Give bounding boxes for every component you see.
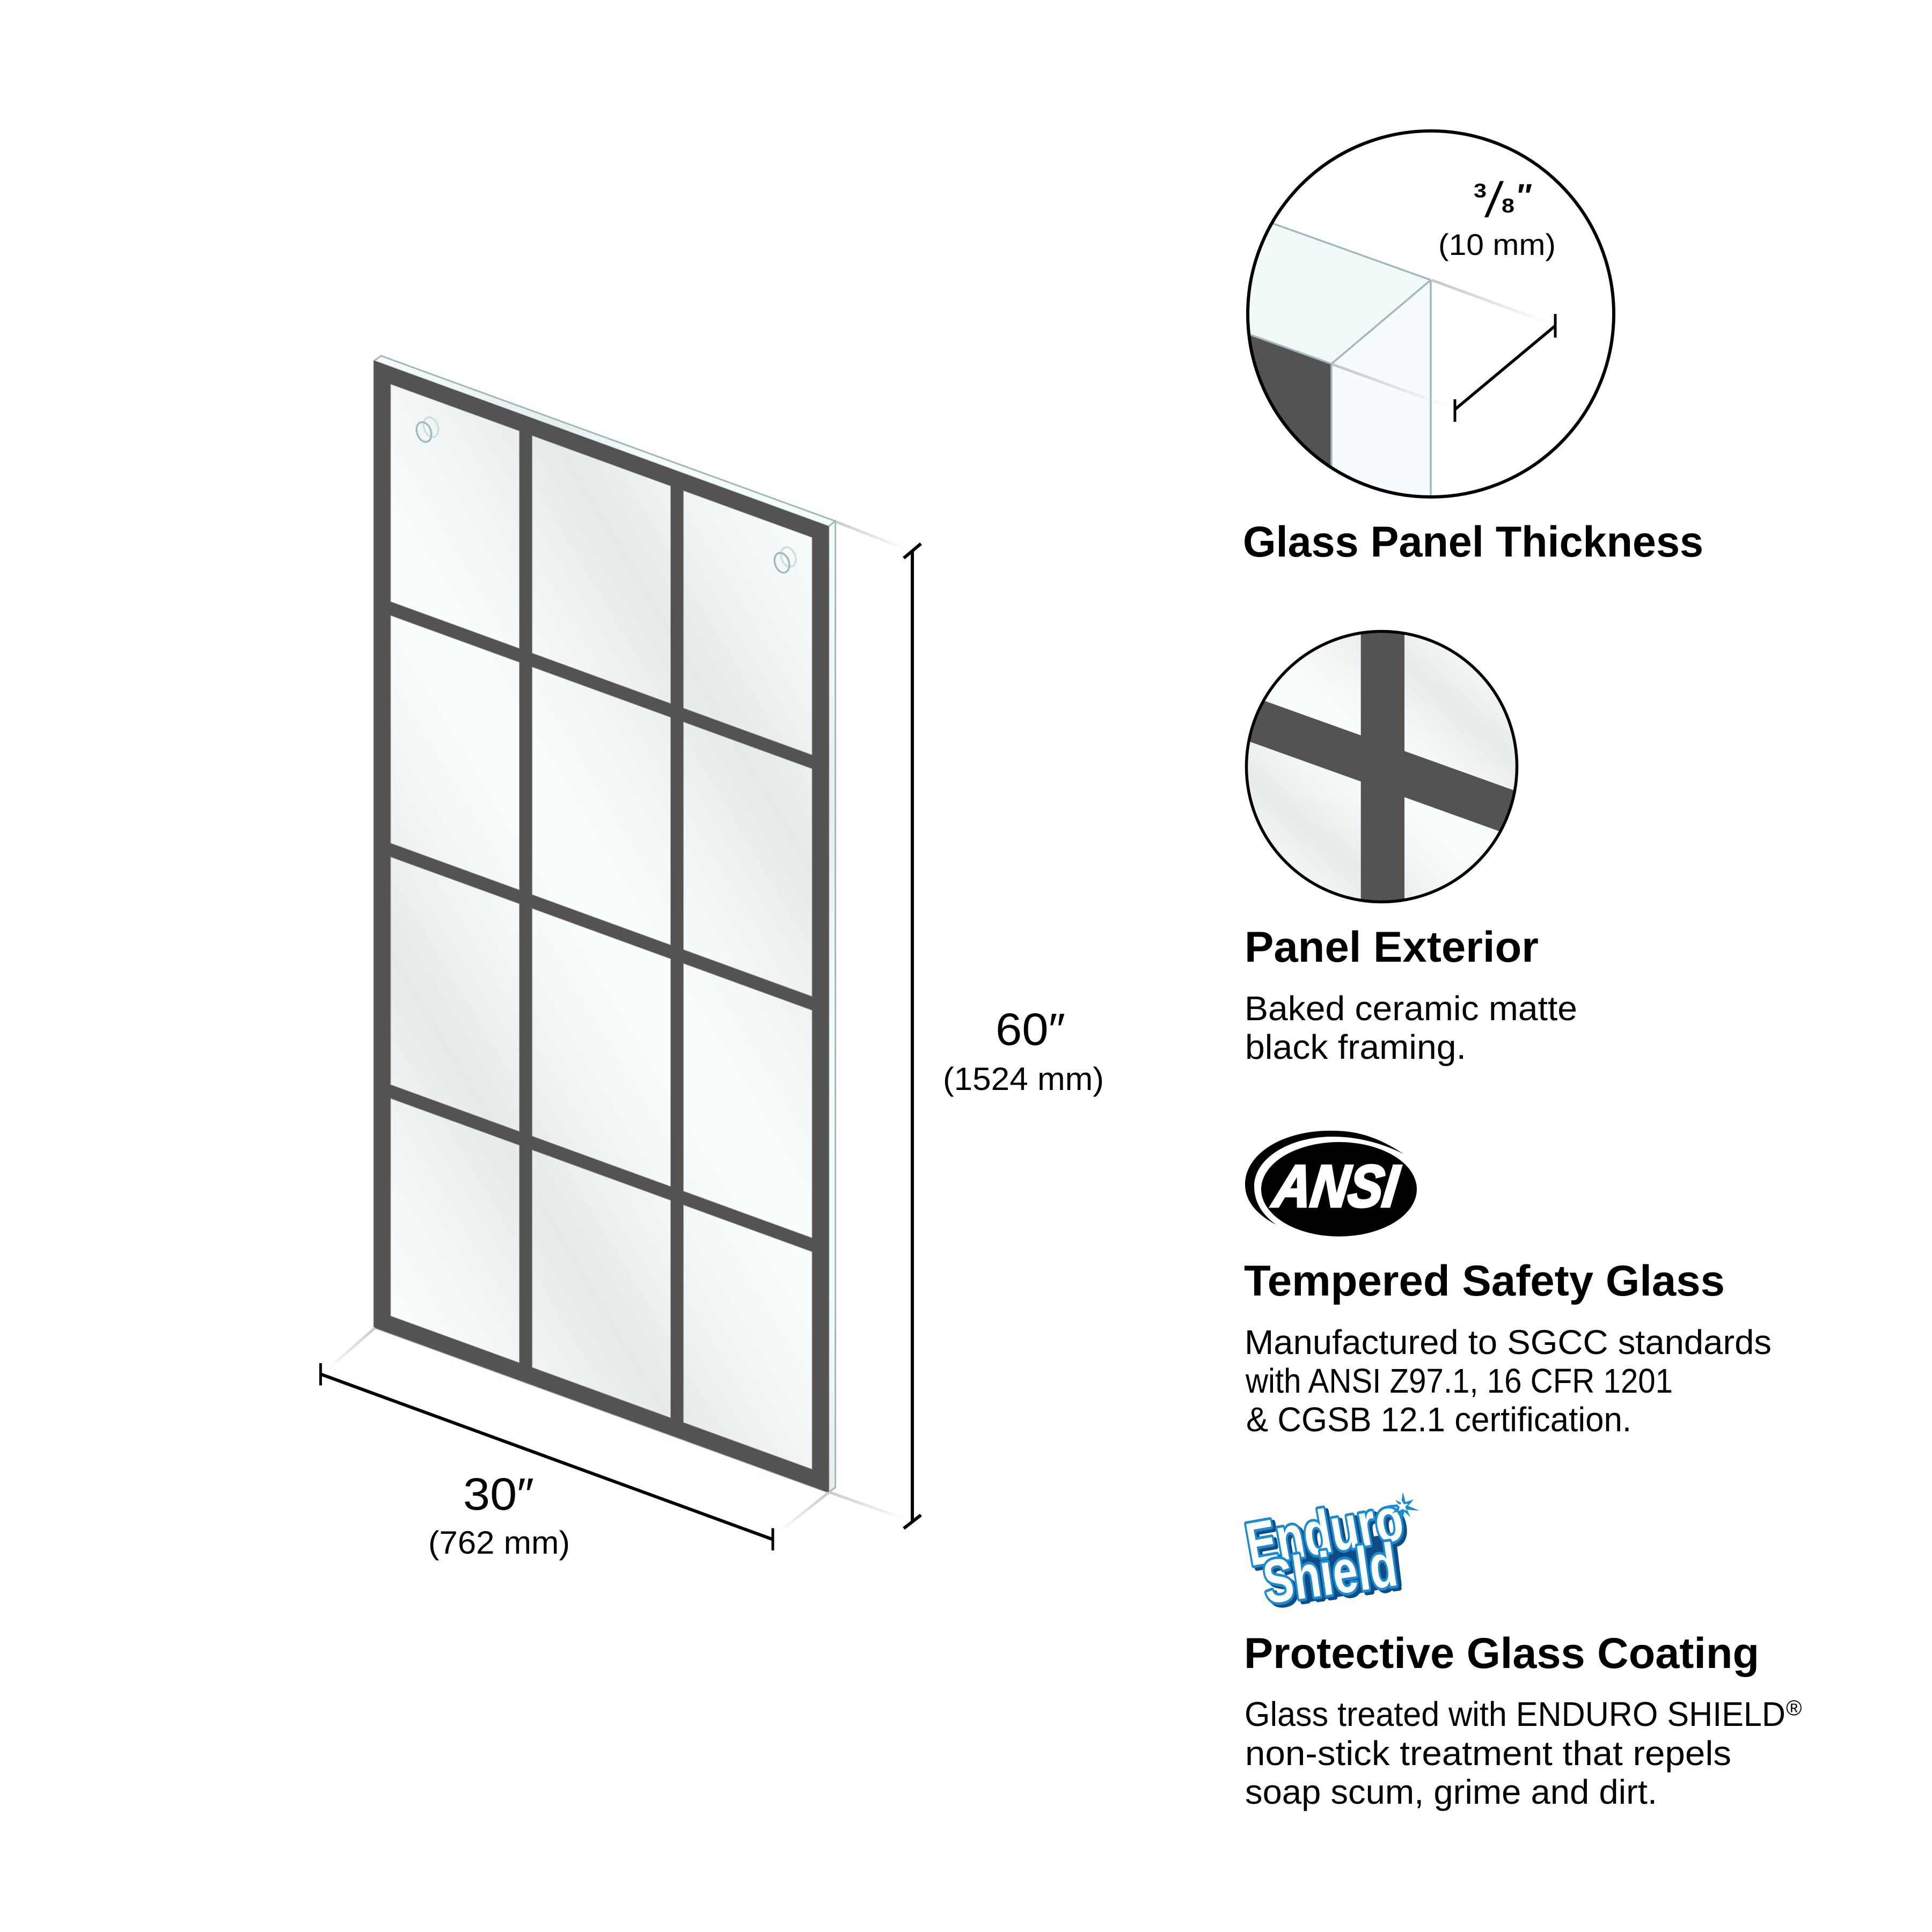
text: panel exterior description: Baked ceramic matte [1245,989,1577,1028]
matte black frame [374,361,829,1492]
thickness fraction: ″ [1516,178,1532,215]
thickness metric value: (10 mm) [1438,228,1556,261]
text: panel exterior description: black framing. [1245,1028,1466,1066]
thickness fraction [1474,172,1532,228]
icon: EnduroShield logo [1241,1484,1419,1617]
icon: EnduroShield logo: Shield [1259,1531,1401,1617]
text: panel exterior description [1245,989,1577,1066]
mounting hole right [772,545,799,575]
bottom glass edge line [374,1328,829,1493]
height dimension [829,522,1104,1528]
icon: EnduroShield logo: Enduro [1241,1484,1408,1579]
width metric value: (762 mm) [428,1525,570,1561]
thickness fraction: / [1483,172,1505,228]
icon: sparkle [1387,1492,1419,1521]
text: coating description: ® [1786,1696,1802,1720]
icon: ANSI logo: ANSI [1269,1153,1403,1219]
main glass panel illustration [374,356,836,1493]
text: tempered glass description: & CGSB 12.1 certification. [1246,1400,1631,1439]
panel: glass thickness detail circle [1234,131,1614,499]
height metric value: (1524 mm) [943,1061,1104,1097]
text: tempered glass description: with ANSI Z97.1, 16 CFR 1201 [1245,1362,1673,1400]
glass right edge [829,521,836,1492]
glass top edge [374,356,836,526]
heading: panel exterior: Panel Exterior [1245,923,1539,971]
heading: protective glass coating: Protective Glass Coating [1244,1629,1759,1678]
text: coating description: Glass treated with ENDURO SHIELD [1245,1695,1785,1733]
height value: 60″ [996,1004,1065,1055]
thickness fraction: 8 [1502,195,1514,217]
text: coating description [1245,1695,1802,1811]
glass left edge line [374,361,375,1327]
text: tempered glass description: Manufactured to SGCC standards [1245,1323,1772,1362]
heading: glass panel thickness: Glass Panel Thickness [1243,518,1703,566]
thickness fraction: 3 [1474,180,1487,202]
heading: tempered safety glass: Tempered Safety Glass [1244,1257,1725,1305]
width dimension [320,1328,829,1561]
text: tempered glass description [1245,1323,1772,1439]
width value: 30″ [463,1469,534,1519]
panel: exterior detail circle [1245,630,1519,904]
text: coating description: soap scum, grime and dirt. [1245,1773,1657,1811]
icon: ANSI logo [1245,1131,1417,1236]
thickness dimension arrow [1455,314,1555,422]
glass panes [391,384,812,1469]
mounting hole left [414,415,441,444]
text: coating description: non-stick treatment that repels [1245,1734,1731,1773]
